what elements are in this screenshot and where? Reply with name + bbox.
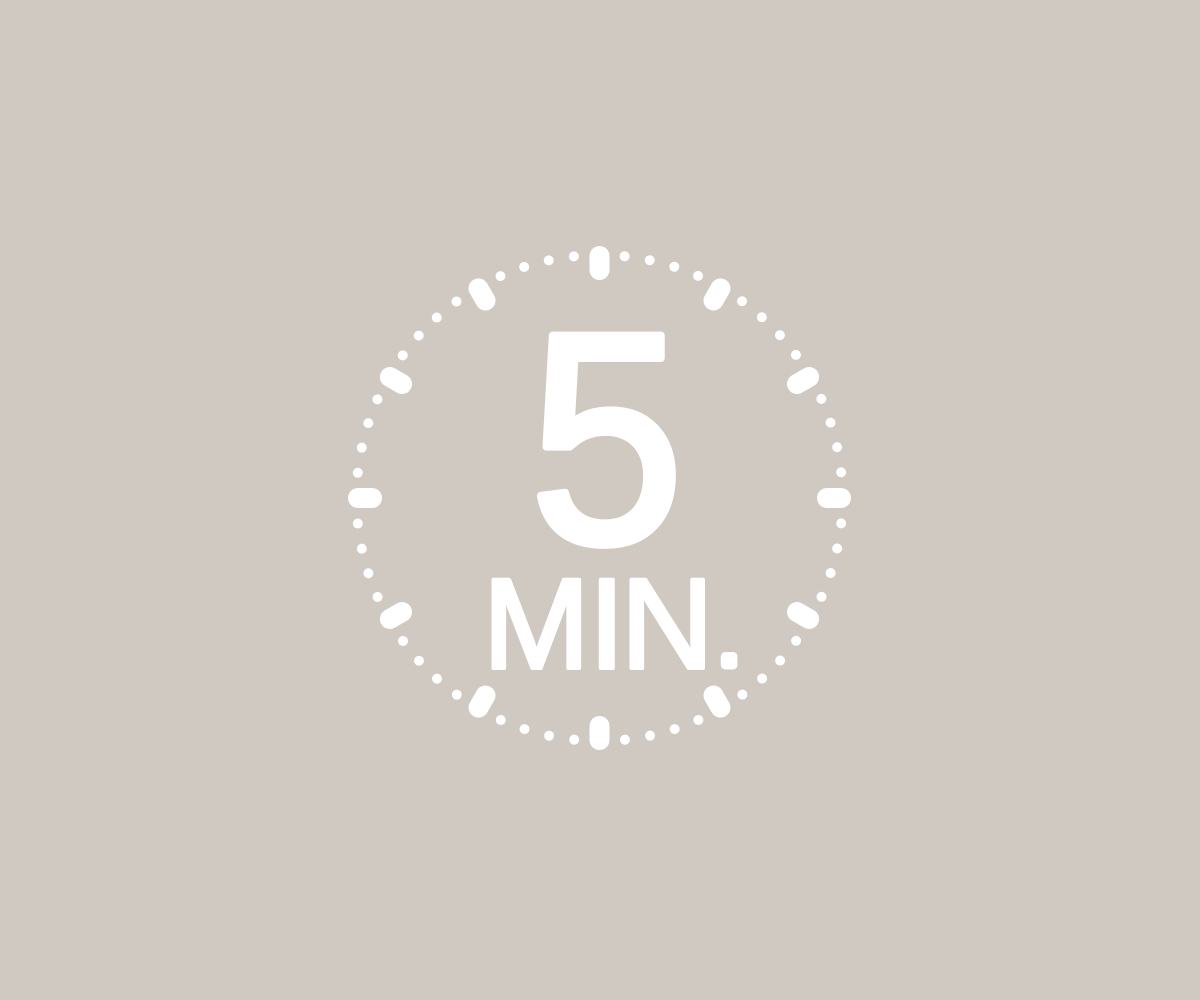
numeral: 5: 5: [530, 271, 684, 606]
label: MIN.: .: [718, 593, 740, 682]
icon: clock dial: [356, 255, 842, 741]
minute dots: [356, 255, 842, 741]
label: MIN.: MIN: [483, 553, 713, 696]
hour tick marks: [358, 256, 841, 740]
